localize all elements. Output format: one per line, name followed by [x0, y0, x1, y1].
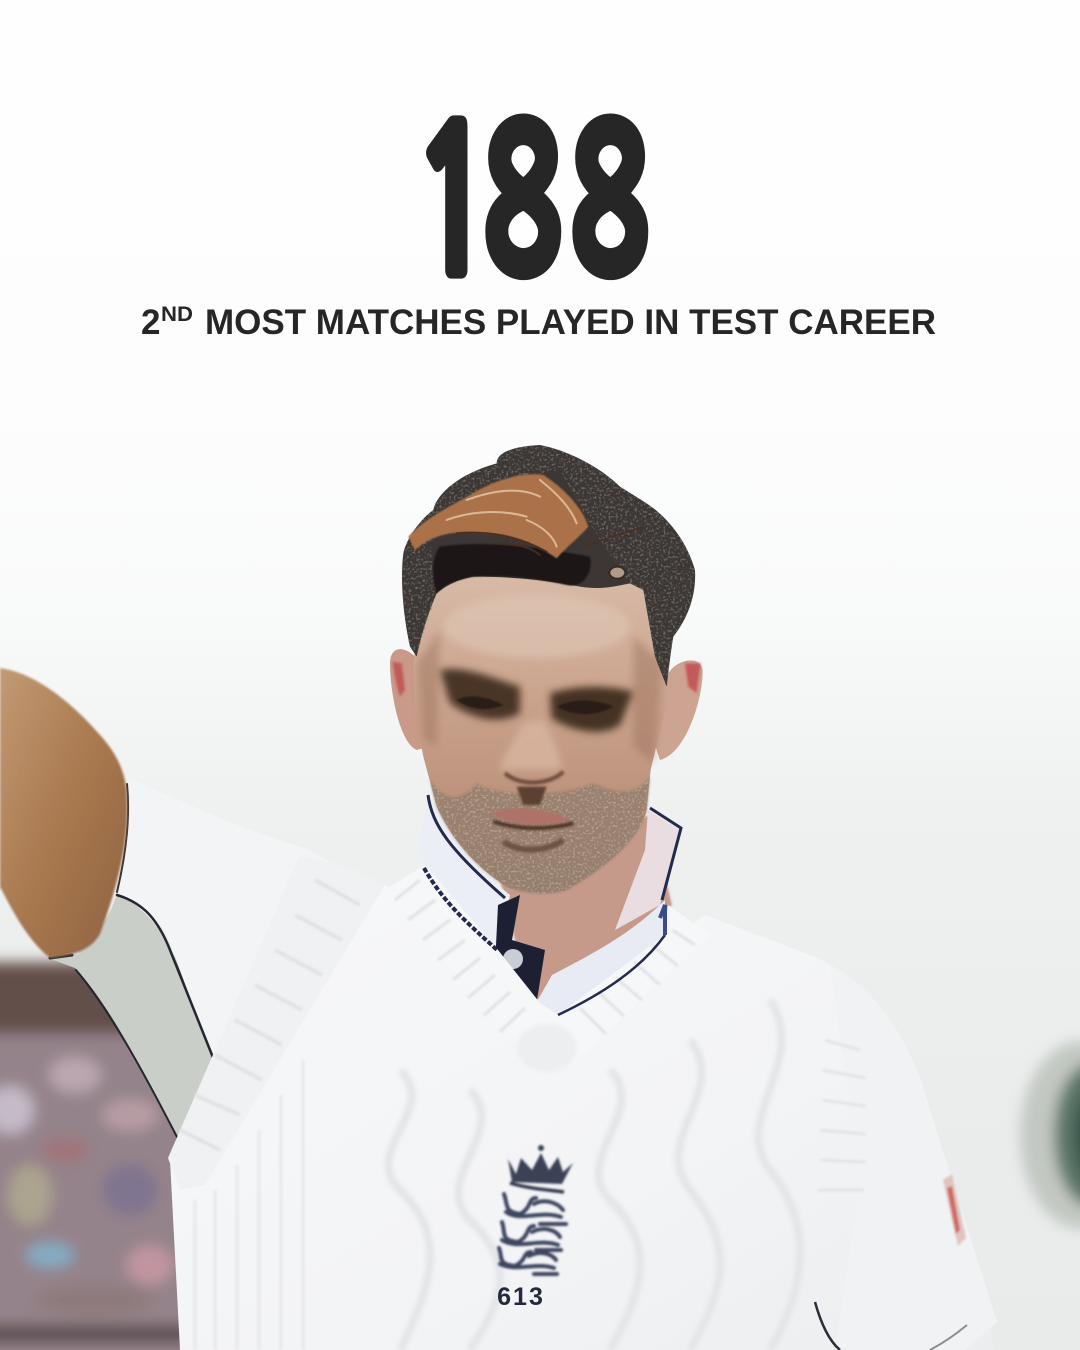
shirt neck skin	[500, 815, 672, 1005]
sleeve piping	[50, 784, 216, 1137]
stubble beard	[430, 777, 650, 894]
ribbed vest hem lines	[195, 1060, 303, 1350]
cable knit pattern	[388, 1000, 800, 1350]
right sleeve	[830, 965, 997, 1350]
raised arm	[0, 668, 127, 958]
big number 188: 188	[413, 106, 650, 303]
vest body	[170, 855, 995, 1350]
subtitle: ND	[161, 303, 193, 326]
eyes	[457, 696, 613, 714]
England crest	[499, 1145, 573, 1274]
V-neck rib collar	[385, 865, 710, 1069]
face skin	[413, 570, 667, 894]
blurred stadium crowd	[0, 951, 189, 1350]
underarm shaded sleeve panel	[48, 893, 215, 1137]
mouth	[490, 808, 573, 850]
hair	[402, 445, 695, 687]
shirt left sleeve	[117, 778, 390, 1190]
philtrum shadow	[517, 787, 547, 805]
navy collar stitching	[424, 868, 665, 1015]
forehead highlight	[443, 595, 630, 658]
placket and button	[495, 895, 545, 1000]
three lions	[499, 1194, 566, 1274]
shirt number 613: 613	[497, 1283, 545, 1311]
subtitle: MOST MATCHES PLAYED IN TEST CAREER	[205, 303, 936, 342]
hair curl highlight	[609, 567, 625, 579]
collar piping	[428, 795, 681, 900]
dark hair roots	[433, 544, 591, 593]
V-neck knot	[517, 1024, 577, 1072]
temple and cheek shading	[417, 630, 663, 763]
player: head and face	[390, 445, 703, 894]
blurred foreground object, right edge	[1020, 1041, 1080, 1229]
grey hair texture	[402, 445, 695, 687]
flag badge on sleeve	[943, 1174, 966, 1246]
crown	[508, 1145, 573, 1192]
ears	[390, 649, 703, 760]
vest right armhole rib	[818, 1040, 866, 1190]
player: shirt and sweater vest	[37, 778, 997, 1350]
brow and eye shadow	[440, 669, 633, 732]
nose	[500, 720, 563, 783]
subtitle: 2	[141, 303, 160, 342]
shirt collar	[418, 795, 510, 965]
blond highlighted fringe	[408, 474, 588, 558]
armhole rib band	[168, 855, 385, 1190]
